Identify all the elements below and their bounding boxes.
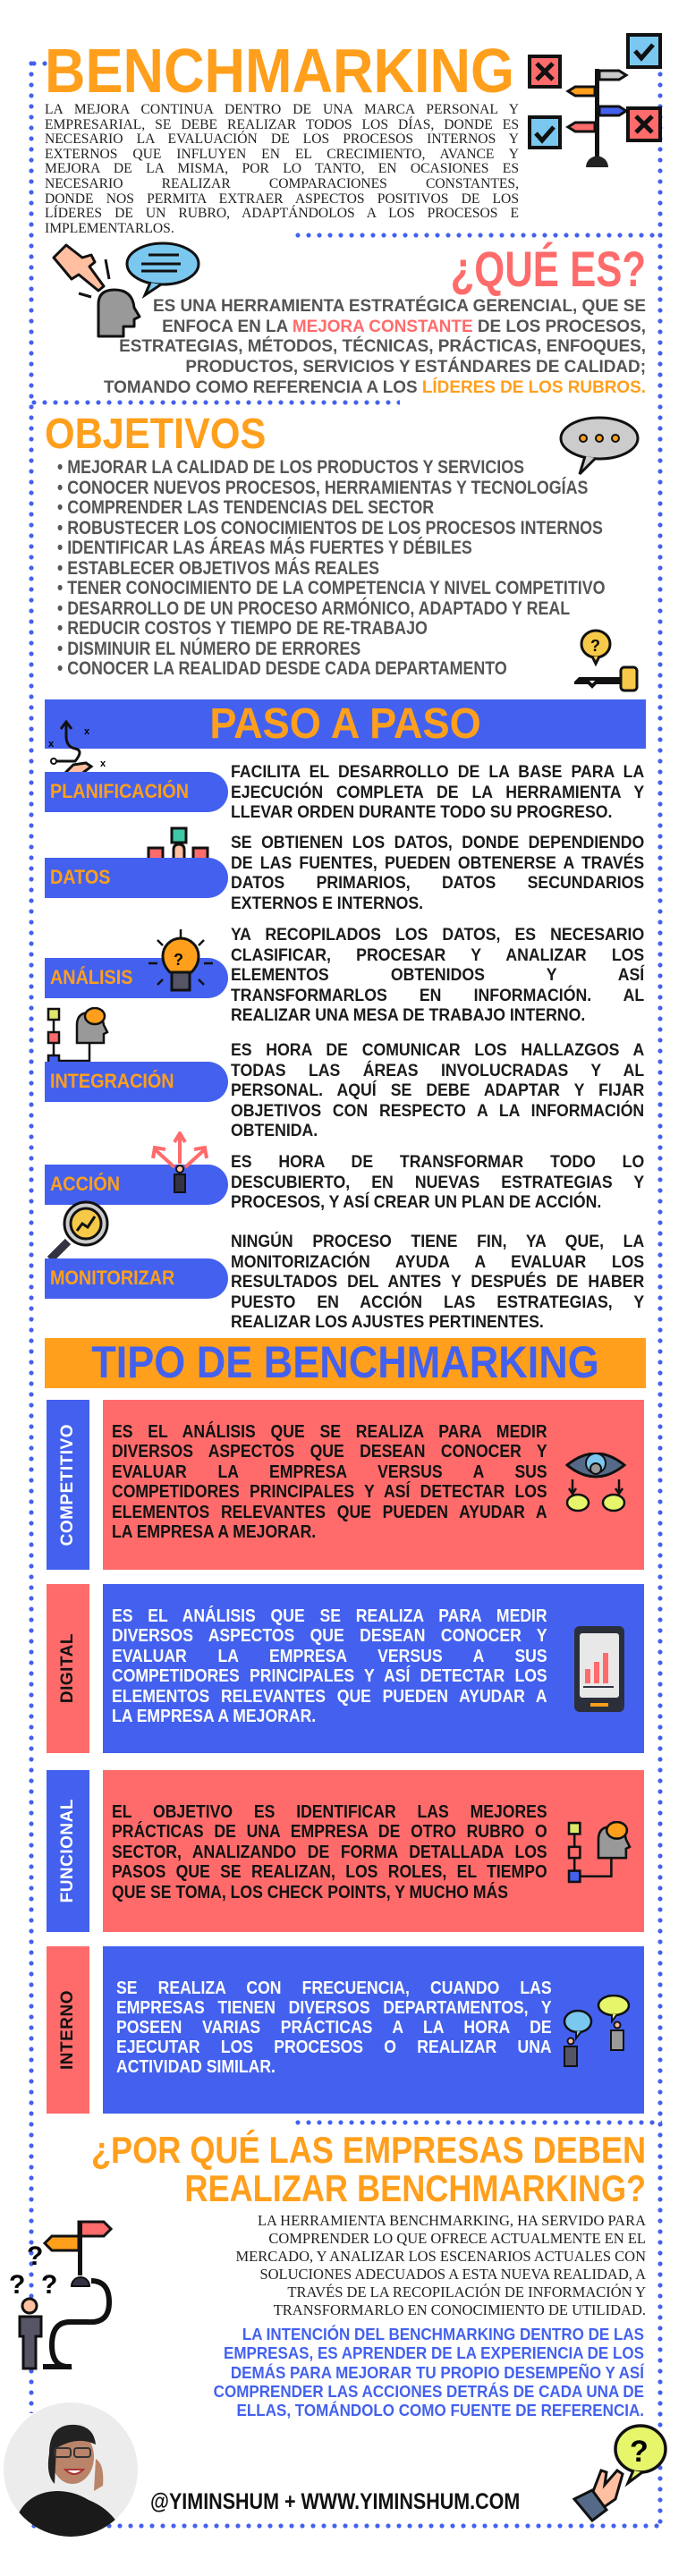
icon: signpost path person: ? — [27, 2241, 43, 2271]
list: objetivos: • REDUCIR COSTOS Y TIEMPO DE RE-TRABAJO — [57, 618, 428, 639]
text: SECTOR, ANALIZANDO DE FORMA DETALLADA LOS — [112, 1843, 547, 1862]
icon: eye with question bubbles — [565, 1453, 626, 1512]
text: qué es definition: ENFOCA EN LA MEJORA CONSTANTE DE LOS PROCESOS, — [162, 317, 646, 336]
list: objetivos: • ROBUSTECER LOS CONOCIMIENTOS DE LOS PROCESOS INTERNOS — [57, 517, 603, 538]
text: COMPETIDORES PRINCIPALES Y ASÍ DETECTAR LOS — [112, 1666, 547, 1686]
title: BENCHMARKING — [45, 36, 514, 106]
intro text: LÍDERES DE UN RUBRO, ADAPTÁNDOLOS A LOS PROCESOS E — [45, 206, 519, 221]
step: análisis: ANÁLISIS — [50, 966, 132, 988]
text: FACILITA EL DESARROLLO DE LA BASE PARA LA — [231, 763, 644, 782]
text: TRANSFORMARLOS EN INFORMACIÓN. AL — [231, 986, 644, 1005]
text: por qué paragraph: SOLUCIONES ADECUADOS A ESTA NUEVA REALIDAD, A — [259, 2266, 646, 2283]
step: planificación — [45, 772, 228, 812]
step: acción — [45, 1165, 228, 1205]
text: COMPETIDORES PRINCIPALES Y ASÍ DETECTAR LOS — [112, 1482, 547, 1502]
icon: two people talking — [564, 1995, 630, 2067]
text: por qué paragraph: TRANSFORMARLO EN CONOCIMIENTO DE UTILIDAD. — [274, 2301, 646, 2318]
icon: question bubble and key — [574, 630, 639, 692]
text: ELEMENTOS OBTENIDOS Y ASÍ — [231, 966, 644, 985]
text: blue intention paragraph: ELLAS, TOMÁNDOLO COMO FUENTE DE REFERENCIA. — [237, 2401, 644, 2419]
text: qué es definition: TOMANDO COMO REFERENCIA A LOS LÍDERES DE LOS RUBROS. — [104, 377, 646, 397]
text: CLASIFICAR, PROCESAR Y ANALIZAR LOS — [231, 946, 644, 964]
text: qué es definition: ES UNA HERRAMIENTA ESTRATÉGICA GERENCIAL, QUE SE — [153, 296, 646, 316]
text: OBJETIVOS CON RESPECTO A LA INFORMACIÓN — [231, 1102, 644, 1120]
list: objetivos: • MEJORAR LA CALIDAD DE LOS PRODUCTOS Y SERVICIOS — [57, 457, 524, 478]
step: monitorizar: MONITORIZAR — [50, 1267, 174, 1289]
intro text: EXTERNOS QUE INFLUYEN EN EL CRECIMIENTO, AVANCE Y — [45, 147, 519, 162]
step: datos: DATOS — [50, 866, 110, 888]
icon: hand pointing at head with speech bubble — [52, 242, 200, 338]
step: datos — [45, 858, 228, 898]
text: blue intention paragraph: EMPRESAS, ES APRENDER DE LA EXPERIENCIA DE LOS — [224, 2343, 644, 2362]
text: blue intention paragraph: LA INTENCIÓN DEL BENCHMARKING DENTRO DE LAS — [242, 2325, 644, 2343]
icon: gray speech bubble — [560, 417, 639, 475]
text: LLEVAR ORDEN DURANTE TODO SU PROGRESO. — [231, 803, 612, 822]
card: funcional — [47, 1770, 644, 1932]
intro text: LA MEJORA CONTINUA DENTRO DE UNA MARCA PERSONAL Y — [45, 102, 519, 117]
card: digital — [47, 1584, 644, 1753]
list: objetivos: • CONOCER NUEVOS PROCESOS, HERRAMIENTAS Y TECNOLOGÍAS — [57, 478, 588, 497]
text: por qué paragraph: MERCADO, Y ANALIZAR LOS ESCENARIOS ACTUALES CON — [235, 2248, 646, 2265]
text: EJECUCIÓN COMPLETA DE LA HERRAMIENTA Y — [231, 784, 644, 801]
heading: qué es: ¿QUÉ ES? — [451, 241, 646, 297]
icon: signpost path person — [9, 2220, 113, 2370]
icon: lightbulb: ? — [174, 951, 183, 969]
list: objetivos: • DESARROLLO DE UN PROCESO ARMÓNICO, ADAPTADO Y REAL — [57, 597, 570, 619]
photo: author portrait — [4, 2402, 138, 2537]
text: DESCUBIERTO, EN NUEVAS ESTRATEGIAS Y — [231, 1174, 644, 1191]
text: PRÁCTICAS DE UNA EMPRESA DE OTRO RUBRO O — [112, 1822, 547, 1842]
list: objetivos: • COMPRENDER LAS TENDENCIAS DEL SECTOR — [57, 497, 434, 518]
text: ELEMENTOS RELEVANTES QUE PUEDEN AYUDAR A — [112, 1503, 547, 1522]
card: digital: DIGITAL — [58, 1633, 77, 1704]
banner: tipo de benchmarking: TIPO DE BENCHMARKING — [91, 1337, 599, 1387]
icon: planning route hand: x — [84, 726, 90, 737]
text: ES HORA DE COMUNICAR LOS HALLAZGOS A — [231, 1041, 644, 1060]
icon: planning route hand — [48, 720, 106, 772]
text: REALIZAR LOS AJUSTES PERTINENTES. — [231, 1313, 544, 1332]
text: DIVERSOS ASPECTOS QUE DESEAN CONOCER Y — [112, 1626, 547, 1646]
text: PUESTO EN ACCIÓN LAS ESTRATEGIAS, Y — [231, 1293, 644, 1311]
icon: signpost path person: ? — [41, 2270, 57, 2300]
banner: paso a paso: PASO A PASO — [209, 700, 481, 748]
banner: paso a paso — [45, 699, 646, 749]
text: qué es definition: ESTRATEGIAS, MÉTODOS, TÉCNICAS, PRÁCTICAS, ENFOQUES, — [119, 336, 646, 356]
icon: hand with question bubble: ? — [630, 2435, 649, 2469]
icon: integration head with boxes — [47, 1007, 109, 1062]
intro text: EMPRESARIAL, SE DEBE REALIZAR TODOS LOS DÍAS, DONDE ES — [45, 117, 519, 132]
card: funcional: FUNCIONAL — [58, 1799, 77, 1903]
text: YA RECOPILADOS LOS DATOS, ES NECESARIO — [231, 926, 644, 945]
icon: functional head with boxes — [567, 1821, 632, 1884]
text: OBTENIDA. — [231, 1122, 318, 1140]
text: SE REALIZA CON FRECUENCIA, CUANDO LAS — [116, 1979, 552, 1998]
step: integración: INTEGRACIÓN — [50, 1070, 174, 1092]
text: ES HORA DE TRANSFORMAR TODO LO — [231, 1153, 644, 1172]
card: competitivo: COMPETITIVO — [58, 1424, 77, 1546]
intro text: NECESARIO REALIZAR COMPARACIONES CONSTANTES, — [45, 176, 519, 191]
text: qué es definition: PRODUCTOS, SERVICIOS Y ESTÁNDARES DE CALIDAD; — [185, 357, 646, 377]
icon: question bubble and key: ? — [590, 637, 600, 655]
text: EJECUTAR LOS PROCESOS O REALIZAR UNA — [116, 2038, 552, 2057]
text: REALIZAR UNA MESA DE TRABAJO INTERNO. — [231, 1006, 585, 1025]
text: QUE SE TOMA, LOS CHECK POINTS, Y MUCHO MÁS — [112, 1883, 508, 1902]
text: EMPRESAS TIENEN DIVERSOS DEPARTAMENTOS, Y — [116, 1998, 552, 2018]
text: blue intention paragraph: DEMÁS PARA MEJORAR TU PROPIO DESEMPEÑO Y ASÍ — [231, 2363, 644, 2382]
text: por qué paragraph — [235, 2212, 646, 2318]
intro text: DONDE NOS PERMITA EXTRAER ASPECTOS POSITIVOS DE LOS — [45, 191, 519, 207]
step: planificación: PLANIFICACIÓN — [50, 780, 189, 802]
step: monitorizar — [45, 1258, 228, 1299]
text: DE LAS FUENTES, PUEDEN OBTENERSE A TRAVÉS — [231, 853, 644, 873]
icon: hand with question bubble — [572, 2424, 667, 2522]
icon: datos hand choice — [147, 826, 209, 859]
text: por qué paragraph: TRAVÉS DE LA RECOPILACIÓN DE INFORMACIÓN Y — [287, 2284, 646, 2301]
intro text — [45, 102, 519, 236]
text: por qué paragraph: LA HERRAMIENTA BENCHMARKING, HA SERVIDO PARA — [258, 2212, 646, 2229]
text: POSEEN VARIAS PRÁCTICAS A LA HORA DE — [116, 2018, 552, 2038]
card: competitivo — [47, 1400, 644, 1570]
heading: por qué: ¿POR QUÉ LAS EMPRESAS DEBEN — [91, 2129, 646, 2171]
list: objetivos: • TENER CONOCIMIENTO DE LA COMPETENCIA Y NIVEL COMPETITIVO — [57, 578, 606, 598]
text: EL OBJETIVO ES IDENTIFICAR LAS MEJORES — [112, 1802, 547, 1822]
text: ES EL ANÁLISIS QUE SE REALIZA PARA MEDIR — [112, 1422, 547, 1442]
step: acción: ACCIÓN — [50, 1173, 120, 1195]
intro text: MEJORA DE LA MISMA, POR LO TANTO, EN OCASIONES ES — [45, 161, 519, 176]
text: RESULTADOS DEL ANTES Y DESPUÉS DE HABER — [231, 1273, 644, 1292]
text: LA EMPRESA A MEJORAR. — [112, 1707, 316, 1726]
list: objetivos: • DISMINUIR EL NÚMERO DE ERRORES — [57, 639, 360, 658]
list: objetivos — [57, 457, 606, 679]
text: TODAS LAS ÁREAS INVOLUCRADAS Y AL — [231, 1061, 644, 1080]
icon: planning route hand: x — [48, 739, 55, 750]
text: MONITORIZACIÓN AYUDA A EVALUAR LOS — [231, 1252, 644, 1272]
text: PERSONAL. AQUÍ SE DEBE ADAPTAR Y FIJAR — [231, 1081, 644, 1100]
icon: lightbulb — [148, 929, 213, 991]
icon: flowchart signpost — [528, 33, 662, 167]
text: ES EL ANÁLISIS QUE SE REALIZA PARA MEDIR — [112, 1606, 547, 1626]
text: PROCESOS, Y ASÍ CREAR UN PLAN DE ACCIÓN. — [231, 1193, 601, 1212]
list: objetivos: • IDENTIFICAR LAS ÁREAS MÁS FUERTES Y DÉBILES — [57, 538, 472, 558]
text: LA EMPRESA A MEJORAR. — [112, 1522, 316, 1542]
heading: objetivos: OBJETIVOS — [45, 411, 266, 458]
footer: credits: @YIMINSHUM + WWW.YIMINSHUM.COM — [150, 2489, 520, 2514]
heading: por qué — [91, 2129, 646, 2209]
text: blue intention paragraph: COMPRENDER LAS ACCIONES DETRÁS DE CADA UNA DE — [214, 2382, 644, 2401]
icon: planning route hand: x — [100, 758, 106, 769]
text: EXTERNOS E INTERNOS. — [231, 894, 423, 912]
step: integración — [45, 1062, 228, 1102]
text: EVALUAR LA EMPRESA VERSUS A SUS — [112, 1462, 547, 1482]
text: SE OBTIENEN LOS DATOS, DONDE DEPENDIENDO — [231, 834, 644, 852]
text: ACTIVIDAD SIMILAR. — [116, 2057, 276, 2077]
text: DIVERSOS ASPECTOS QUE DESEAN CONOCER Y — [112, 1442, 547, 1462]
step: análisis — [45, 958, 228, 998]
text: por qué paragraph: COMPRENDER LO QUE OFRECE ACTUALMENTE EN EL — [268, 2230, 646, 2247]
text: ELEMENTOS RELEVANTES QUE PUEDEN AYUDAR A — [112, 1687, 547, 1707]
text: NINGÚN PROCESO TIENE FIN, YA QUE, LA — [231, 1233, 644, 1251]
icon: action arrows person — [151, 1131, 208, 1193]
text: DATOS PRIMARIOS, DATOS SECUNDARIOS — [231, 874, 644, 893]
text: PASOS QUE SE REALIZAN, LOS ROLES, EL TIEMPO — [112, 1862, 547, 1882]
intro text: NECESARIO LA EVALUACIÓN DE LOS PROCESOS INTERNOS Y — [45, 131, 519, 147]
list: objetivos: • CONOCER LA REALIDAD DESDE CADA DEPARTAMENTO — [57, 658, 507, 679]
list: objetivos: • ESTABLECER OBJETIVOS MÁS REALES — [57, 558, 379, 578]
text: qué es definition — [104, 295, 646, 397]
card: interno — [47, 1946, 644, 2114]
card: interno: INTERNO — [58, 1990, 77, 2070]
icon: phone with chart — [574, 1626, 624, 1712]
text: blue intention paragraph — [214, 2325, 644, 2419]
text: EVALUAR LA EMPRESA VERSUS A SUS — [112, 1647, 547, 1666]
icon: magnifier — [47, 1200, 109, 1258]
intro text: IMPLEMENTARLOS. — [45, 221, 174, 236]
heading: por qué: REALIZAR BENCHMARKING? — [184, 2167, 646, 2209]
icon: signpost path person: ? — [9, 2270, 25, 2300]
